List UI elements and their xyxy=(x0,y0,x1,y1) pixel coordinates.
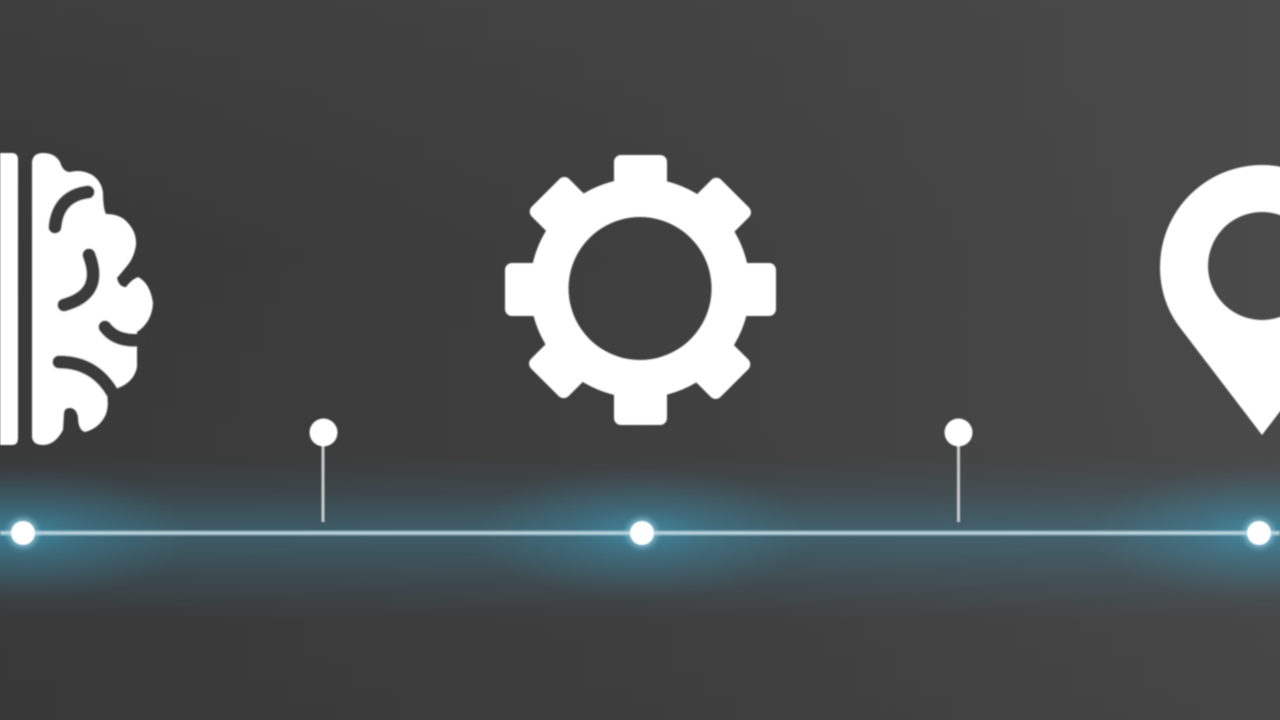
node: right xyxy=(1244,518,1274,548)
icon: brain xyxy=(0,153,153,445)
node: left xyxy=(8,518,38,548)
right hemisphere xyxy=(32,153,153,445)
icon: gear xyxy=(505,155,776,425)
node: centre xyxy=(627,518,657,548)
marker: right pin xyxy=(944,418,972,522)
timeline line xyxy=(0,531,1280,535)
marker: left pin xyxy=(310,418,338,522)
icon: map pin xyxy=(1160,165,1280,435)
timeline glow xyxy=(0,458,1280,618)
left hemisphere (cropped) xyxy=(0,153,18,445)
brain folds xyxy=(55,192,140,392)
